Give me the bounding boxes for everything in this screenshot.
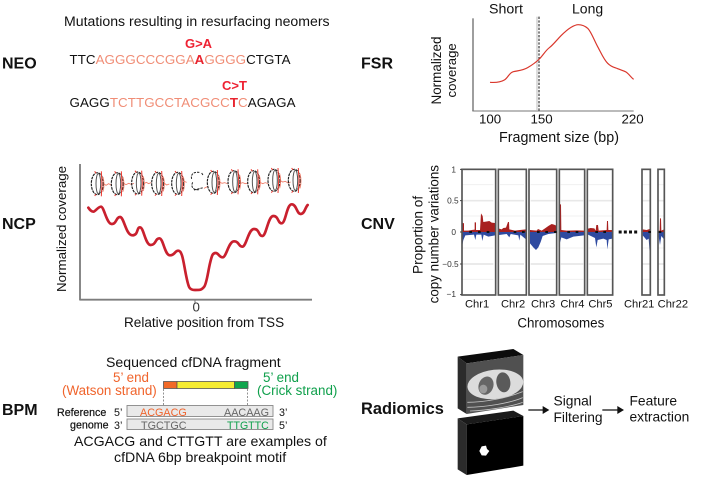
heading: mutations: Mutations resulting in resurfacing neomers (64, 13, 330, 29)
label: Watson strand (62, 370, 157, 398)
nucleosome array (91, 168, 301, 196)
y tick labels: 0 (451, 227, 456, 237)
label: Radiomics: Radiomics (361, 400, 444, 418)
caption (74, 433, 327, 465)
y ticks (460, 169, 462, 295)
mutation label: G>A: G>A (185, 36, 213, 51)
label: signal filtering: Signal (554, 394, 592, 408)
label: CNV: CNV (361, 216, 395, 233)
ellipsis dots (619, 227, 637, 236)
arrows (528, 406, 624, 414)
cfDNA fragment bar (164, 382, 248, 388)
panel: NEO (2, 13, 330, 110)
CT block (458, 349, 525, 414)
sequence 1: TTCAGGGCCCGGAAGGGGCTGTA (70, 52, 291, 67)
reference genome boxes: TGCTGC (141, 420, 187, 432)
axis title: relative position: Relative position from TSS (124, 315, 284, 330)
chromosome labels: Chr4 (560, 299, 585, 311)
label: Watson strand: 5’ end (113, 370, 149, 385)
panel: BPM (2, 354, 337, 465)
label: NCP: NCP (2, 216, 36, 233)
reference genome boxes: AACAAG (224, 407, 269, 419)
reference genome boxes: ACGACG (140, 407, 187, 419)
reference genome labels: genome (70, 420, 109, 432)
panel: CNV (361, 160, 688, 331)
label: signal filtering: Filtering (554, 410, 603, 425)
label: FSR: FSR (361, 56, 393, 72)
images: CT and mask blocks (458, 349, 624, 475)
caption: ACGACG and CTTGTT are examples of (74, 433, 327, 449)
axis title: proportion: copy number variations (426, 165, 441, 303)
axis title: normalized coverage: coverage (444, 43, 459, 98)
y tick labels (442, 164, 459, 299)
chromosome panels (462, 169, 664, 295)
y tick labels: 1 (451, 164, 456, 174)
sequence 2: GAGGTCTTGCCTACGCCTCAGAGA (70, 95, 296, 110)
blue losses (462, 232, 664, 253)
axis tick: 150: 150 (530, 112, 553, 126)
label: feature extraction (630, 394, 689, 424)
axis title: proportion: Proportion of (411, 196, 426, 274)
axis title: normalized coverage: Normalized coverage (54, 166, 69, 292)
chromosome labels: Chr22 (658, 299, 688, 311)
red gains (462, 204, 664, 232)
reference genome labels (57, 407, 287, 432)
chart: fragment size curve (472, 17, 634, 111)
reference genome labels: 5’ (114, 407, 122, 419)
grid lines (462, 185, 664, 279)
chromosome labels: Chr21 (624, 299, 654, 311)
label: signal filtering (554, 394, 603, 425)
label: Short: Short (489, 2, 523, 18)
axis tick: 220: 220 (622, 112, 644, 126)
chromosome labels: Chr5 (588, 299, 613, 311)
panel: FSR (361, 0, 644, 146)
mutation label: C>T: C>T (222, 78, 247, 93)
chromosome labels (465, 299, 688, 311)
y tick labels: −0.5 (442, 259, 459, 269)
reference genome labels: Reference (57, 407, 106, 419)
axis title: normalized coverage (429, 37, 459, 104)
axis tick: 0: 0 (192, 300, 200, 314)
caption: cfDNA 6bp breakpoint motif (114, 449, 286, 465)
label: NEO: NEO (2, 56, 37, 72)
chart: coverage around TSS (79, 164, 312, 304)
axis title: fragment size: Fragment size (bp) (499, 130, 619, 146)
axis title: chromosomes: Chromosomes (517, 316, 605, 331)
axis tick: 100: 100 (479, 112, 501, 126)
mask block (458, 411, 523, 475)
label: Crick strand: 5’ end (263, 370, 299, 385)
reference genome labels: 5’ (279, 420, 287, 432)
chromosome labels: Chr1 (465, 299, 489, 311)
panel: Radiomics (361, 349, 689, 475)
axis title: proportion (411, 165, 441, 303)
label: BPM: BPM (2, 402, 38, 419)
chromosome labels: Chr2 (501, 299, 525, 311)
label: feature extraction: extraction (630, 410, 689, 424)
axis title: normalized coverage: Normalized (429, 37, 444, 104)
chromosome labels: Chr3 (531, 299, 555, 311)
y tick labels: 0.5 (447, 196, 459, 206)
zero line dots (469, 229, 661, 235)
y tick labels: −1 (446, 289, 456, 299)
reference genome labels: 3’ (114, 420, 122, 432)
label: Long: Long (572, 0, 603, 16)
label: Crick strand (257, 370, 337, 398)
chart: copy number variations (411, 160, 688, 331)
label: Crick strand: (Crick strand) (257, 383, 337, 398)
label: Watson strand: (Watson strand) (62, 383, 157, 398)
reference genome boxes: TTGTTC (227, 420, 269, 432)
label: feature extraction: Feature (630, 394, 677, 408)
heading: sequenced fragment: Sequenced cfDNA fragment (106, 354, 281, 370)
reference genome labels: 3’ (279, 407, 287, 419)
reference genome boxes (127, 406, 273, 432)
panel: NCP (2, 164, 312, 330)
